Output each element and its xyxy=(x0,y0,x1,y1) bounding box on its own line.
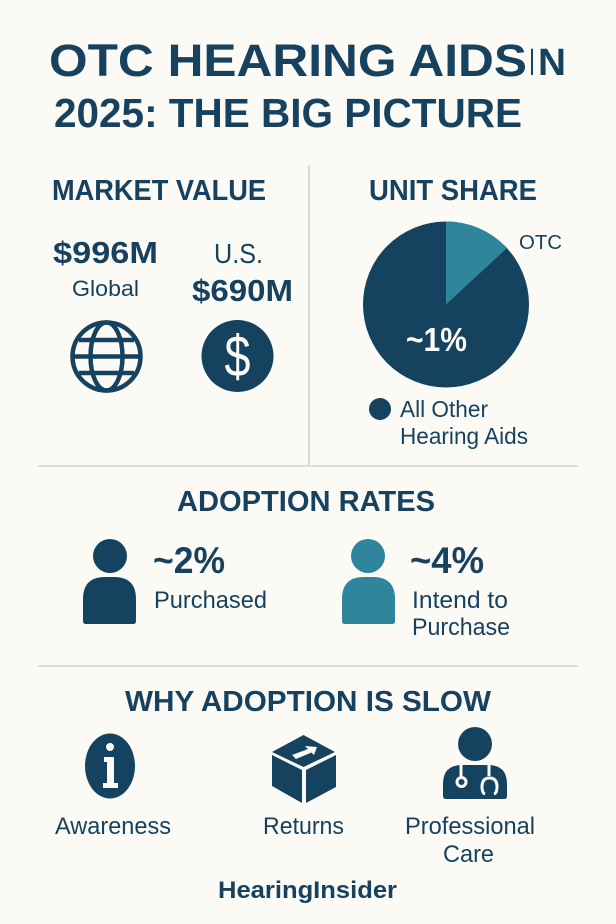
stat: intend to purchase: ~4% xyxy=(410,540,484,581)
title xyxy=(49,35,566,136)
label: returns: Returns xyxy=(263,813,344,840)
icon: information xyxy=(85,734,135,798)
stat: global value: Global xyxy=(72,276,139,301)
stat: intend to purchase: Purchase xyxy=(412,614,510,641)
heading: market value: MARKET VALUE xyxy=(52,175,266,207)
stat: global value xyxy=(53,235,158,301)
panel: adoption rates xyxy=(83,486,510,641)
title: N xyxy=(538,42,566,84)
brand: HearingInsider: HearingInsider xyxy=(218,877,397,904)
icon: person intending xyxy=(342,539,395,624)
icon: person purchased xyxy=(83,539,136,624)
stat: purchased: ~2% xyxy=(153,540,225,581)
panel: why adoption is slow xyxy=(55,686,535,868)
stat: U.S. value: $690M xyxy=(192,273,293,308)
title: I xyxy=(529,42,535,84)
title: 2025: THE BIG PICTURE xyxy=(54,90,522,136)
title: OTC HEARING AIDS xyxy=(49,35,527,86)
icon: dollar coin: $ xyxy=(224,324,250,389)
pie chart: ~1% xyxy=(406,321,467,358)
stat: U.S. value: U.S. xyxy=(214,238,263,269)
pie chart xyxy=(363,221,529,388)
legend: all other hearing aids xyxy=(369,396,528,449)
pie label: OTC: OTC xyxy=(519,232,562,254)
heading: unit share: UNIT SHARE xyxy=(369,175,537,207)
stat: intend to purchase: Intend to xyxy=(412,587,508,614)
legend: all other hearing aids: Hearing Aids xyxy=(400,423,528,449)
panel: unit share xyxy=(363,175,562,449)
label: professional care xyxy=(405,813,535,868)
icon: dollar coin xyxy=(202,320,274,392)
icon: return box xyxy=(272,735,336,803)
label: professional care: Professional xyxy=(405,813,535,840)
stat: global value: $996M xyxy=(53,235,158,270)
stat: purchased: Purchased xyxy=(154,587,267,614)
stat: U.S. value xyxy=(192,238,293,308)
stat: purchased xyxy=(153,540,267,614)
panel: market value xyxy=(52,175,293,392)
heading: why adoption is slow: WHY ADOPTION IS SLOW xyxy=(125,686,492,718)
label: awareness: Awareness xyxy=(55,813,171,840)
label: professional care: Care xyxy=(443,841,494,868)
icon: globe xyxy=(72,322,141,390)
legend: all other hearing aids: All Other xyxy=(400,396,488,422)
heading: adoption rates: ADOPTION RATES xyxy=(177,486,435,518)
stat: intend to purchase xyxy=(410,540,510,641)
icon: doctor xyxy=(443,727,507,799)
